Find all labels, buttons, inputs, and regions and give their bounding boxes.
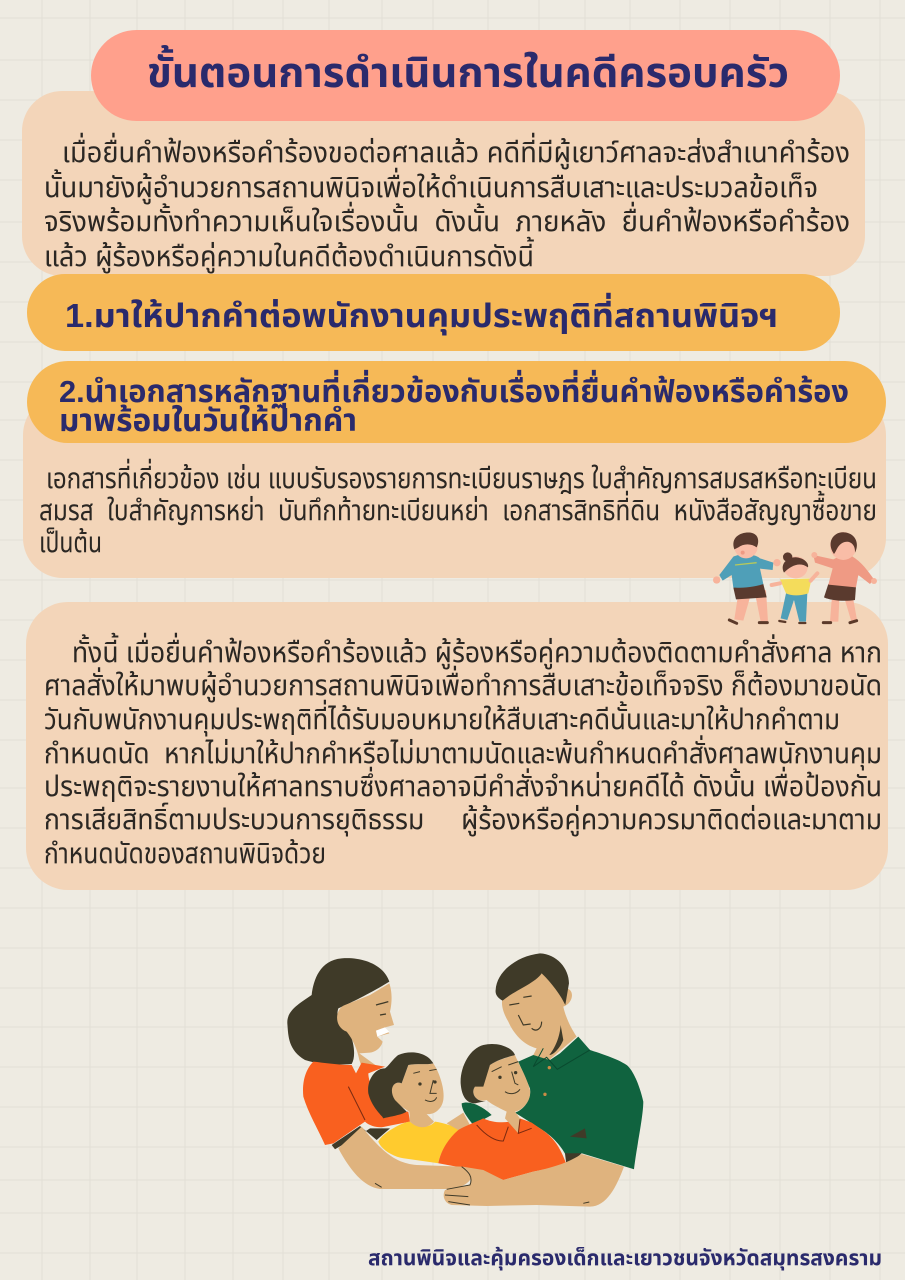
daughter: [368, 1052, 470, 1163]
footer: สถานพินิจและคุ้มครองเด็กและเยาวชนจังหวัดสมุทรสงคราม: [368, 1247, 882, 1271]
text block: follow-up notice: กำหนดนัดของสถานพินิจด้วย: [44, 838, 326, 870]
father: [462, 953, 643, 1169]
heading: step 1: [27, 274, 840, 351]
son: [438, 1044, 567, 1180]
panel: follow-up notice: [26, 602, 888, 890]
text block: introduction: นั้นมายังผู้อำนวยการสถานพินิจเพื่อให้ดำเนินการสืบเสาะและประมวลข้อเท็จ: [44, 167, 818, 205]
heading: step 2: มาพร้อมในวันให้ปากคำ: [59, 403, 357, 438]
panel: introduction: [22, 91, 865, 276]
mother figure: [811, 532, 877, 623]
text block: follow-up notice: [44, 632, 882, 870]
heading: step 2: 2.นำเอกสารหลักฐานที่เกี่ยวข้องกับเรื่องที่ยื่นคำฟ้องหรือคำร้อง: [59, 369, 849, 409]
title: [91, 30, 840, 121]
text block: introduction: จริงพร้อมทั้งทำความเห็นใจเรื่องนั้น ดังนั้น ภายหลัง ยื่นคำฟ้องหรือคำร้อง: [44, 201, 850, 238]
arms: [338, 1127, 624, 1207]
heading: step 1: 1.มาให้ปากคำต่อพนักงานคุมประพฤติที่สถานพินิจฯ: [65, 292, 778, 336]
mother: [287, 958, 410, 1149]
icon: small family: [713, 532, 877, 623]
panel: documents: [23, 395, 886, 578]
icon: family embrace: [287, 953, 643, 1207]
heading: step 2: [27, 361, 886, 443]
text block: introduction: เมื่อยื่นคำฟ้องหรือคำร้องขอต่อศาลแล้ว คดีที่มีผู้เยาว์ศาลจะส่งสำเนาคำร้อง: [62, 132, 850, 170]
text block: documents: เป็นต้น: [39, 527, 102, 559]
text block: documents: [39, 458, 877, 559]
father figure: [713, 533, 781, 623]
text block: introduction: แล้ว ผู้ร้องหรือคู่ความในคดีต้องดำเนินการดังนี้: [44, 236, 534, 274]
text block: introduction: [44, 132, 850, 274]
title: ขั้นตอนการดำเนินการในคดีครอบครัว: [147, 44, 789, 96]
child figure: [772, 552, 817, 623]
